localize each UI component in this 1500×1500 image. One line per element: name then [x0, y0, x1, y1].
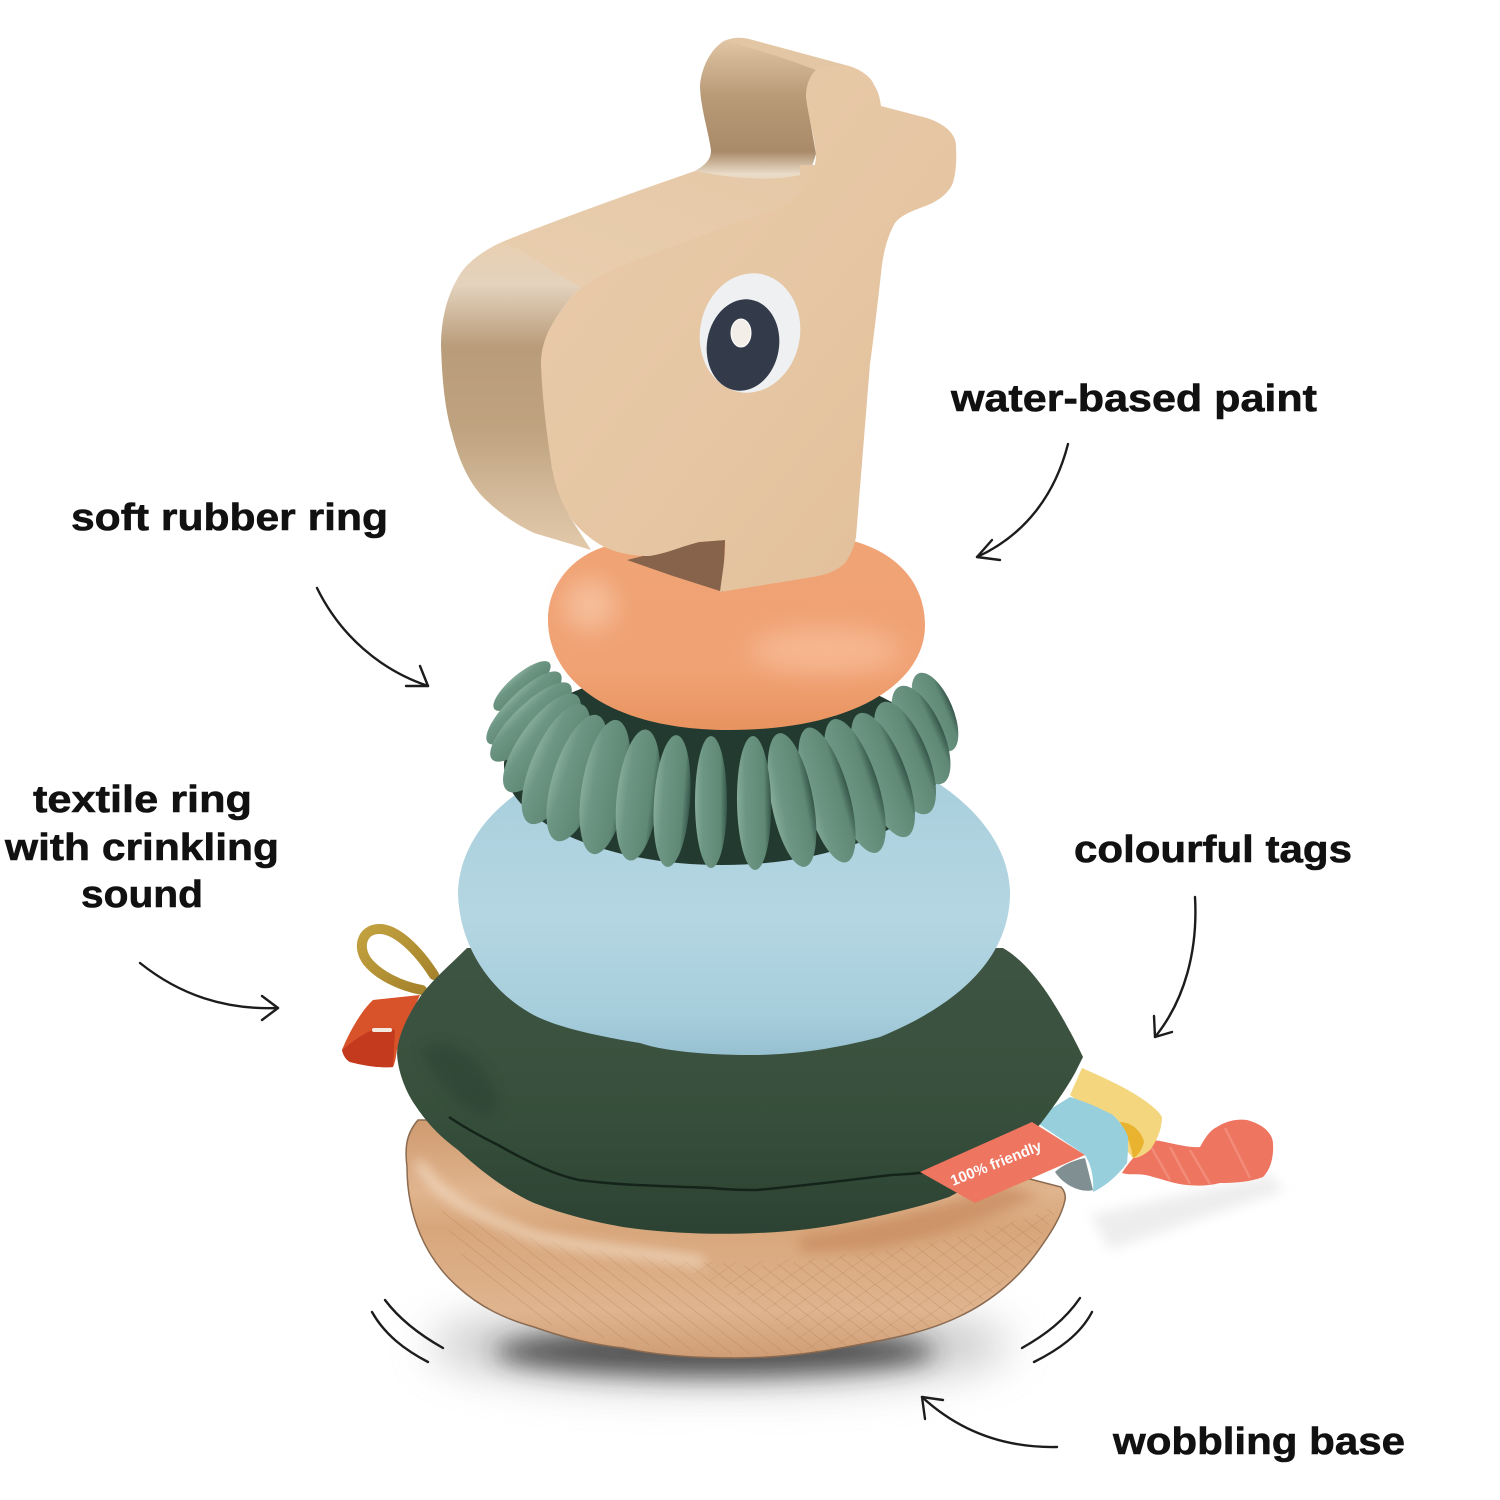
wooden wobbling base	[406, 1120, 1065, 1358]
icon: eye	[690, 265, 810, 401]
green textile ring	[397, 948, 1083, 1234]
label: soft rubber ring: soft rubber ring	[71, 497, 388, 539]
rope tag	[1122, 1120, 1273, 1186]
orange wooden ring	[548, 531, 925, 730]
arrow: water-based paint	[977, 444, 1068, 560]
ground shadow	[430, 1175, 1285, 1387]
arrow: textile ring	[140, 963, 278, 1020]
label: textile ring with crinkling sound: with crinkling	[4, 827, 279, 869]
rim warm shading	[800, 1185, 1040, 1252]
stacking toy	[342, 38, 1285, 1387]
arrow: colourful tags	[1154, 897, 1195, 1037]
arrow: wobbling base	[922, 1397, 1057, 1447]
yellow tag	[1070, 1068, 1162, 1158]
label: wobbling base: wobbling base	[1112, 1421, 1405, 1463]
light blue ring	[458, 775, 1010, 1055]
label: textile ring with crinkling sound	[4, 779, 279, 916]
red tag	[342, 995, 420, 1067]
wobble lines: right	[1022, 1298, 1092, 1362]
head: front face	[541, 65, 956, 592]
coral label	[920, 1122, 1085, 1203]
green rubber ring with ribs	[477, 654, 968, 871]
head: ear top	[724, 39, 849, 70]
arrow: soft rubber ring	[317, 588, 428, 686]
blue tag	[1033, 1097, 1128, 1192]
ring highlight right	[750, 628, 900, 672]
label text: 100% friendly	[948, 1137, 1045, 1190]
gold loop tag	[362, 929, 434, 990]
head: notch	[627, 540, 725, 592]
head: ear back side	[695, 38, 816, 200]
wobble lines: left	[372, 1300, 443, 1362]
head: snout side	[441, 242, 591, 550]
label: water-based paint: water-based paint	[950, 378, 1317, 420]
fabric shading	[420, 1044, 500, 1115]
rim highlight	[420, 1165, 700, 1262]
fabric seam	[449, 1117, 925, 1190]
head: top surface	[502, 165, 830, 288]
label: colourful tags: colourful tags	[1074, 829, 1352, 871]
label: textile ring with crinkling sound: sound	[81, 874, 203, 916]
wooden head	[441, 38, 956, 592]
ring highlight left	[564, 579, 616, 631]
label: textile ring with crinkling sound: textile ring	[33, 779, 252, 821]
